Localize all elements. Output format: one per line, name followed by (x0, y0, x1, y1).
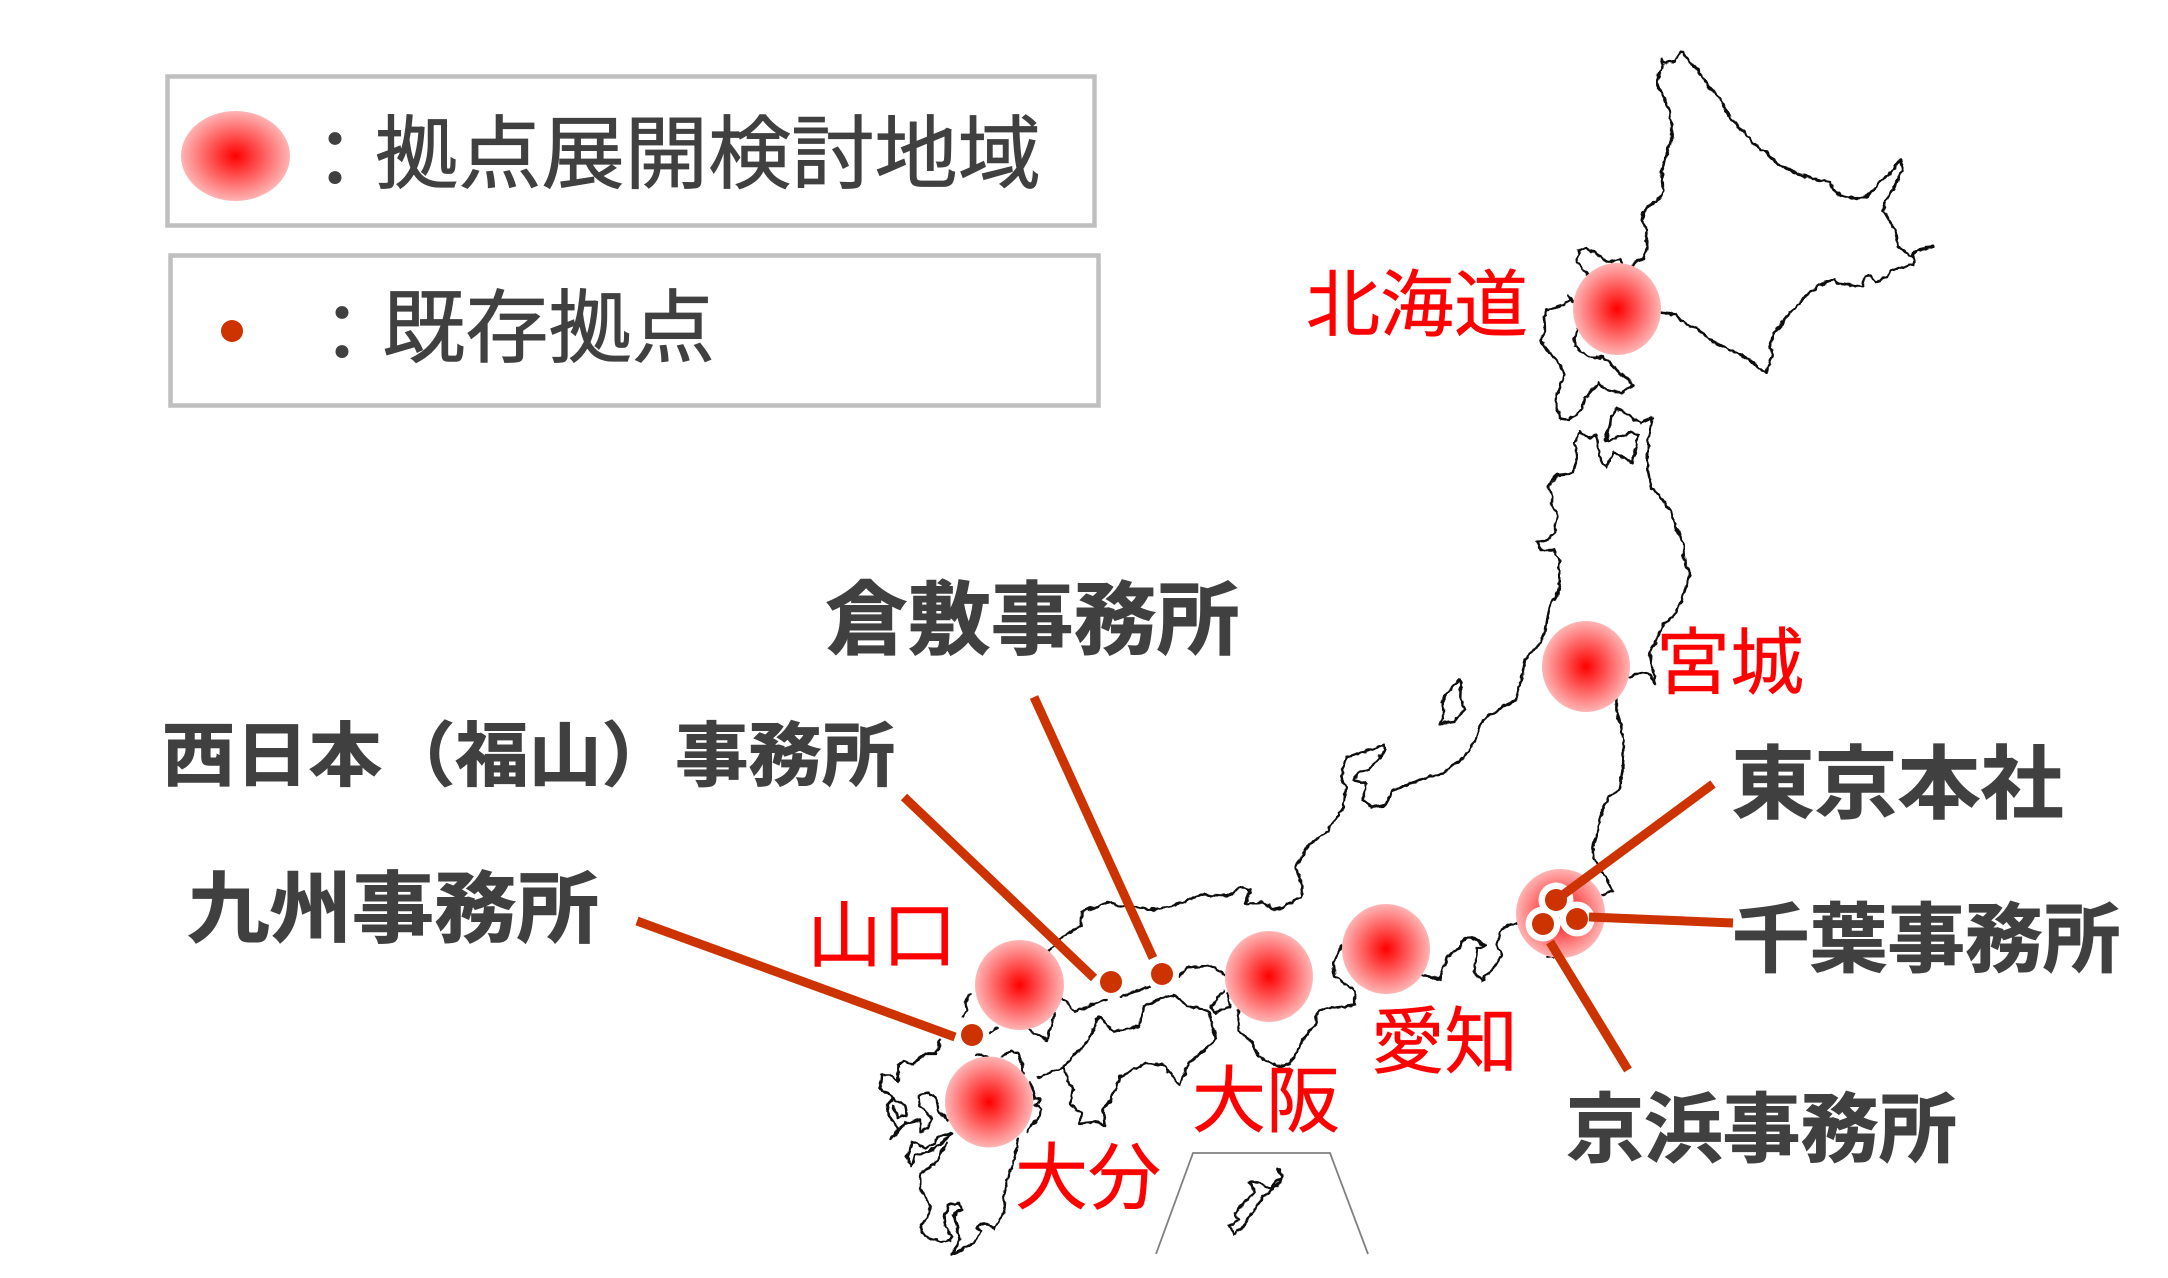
candidate region: Osaka (1225, 931, 1313, 1022)
leader line: Kyushu office (637, 921, 955, 1037)
label: Aichi: 愛知 (1371, 1002, 1518, 1083)
candidate region: Aichi (1342, 904, 1430, 994)
label: Hokkaido: 北海道 (1306, 265, 1528, 346)
leader line: Kurashiki office (1034, 697, 1153, 958)
label: Oita: 大分 (1015, 1138, 1161, 1219)
leader line: Keihin office (1550, 942, 1628, 1070)
white halos around offices (955, 882, 1594, 1052)
legend icon: dot (221, 320, 243, 342)
label: West Japan (Fukuyama) office: 西日本（福山）事務所 (162, 717, 895, 795)
label: Osaka: 大阪 (1192, 1061, 1340, 1142)
candidate region: Kanto (1516, 869, 1605, 958)
label: Miyagi: 宮城 (1656, 623, 1804, 704)
leader line: Chiba office (1589, 917, 1733, 923)
label: Chiba office: 千葉事務所 (1732, 898, 2120, 983)
candidate region: Oita (945, 1056, 1033, 1148)
label: Yamaguchi: 山口 (807, 896, 957, 977)
Tokai and Kanto south coast (1422, 923, 1553, 980)
label: Kyushu office: 九州事務所 (187, 865, 599, 953)
legend: existing offices (170, 256, 1098, 406)
legend colon: ： (295, 116, 375, 205)
leader line: West Japan office (904, 797, 1094, 978)
western Honshu, Shikoku, Kii peninsula, Okinawa (964, 895, 1355, 1235)
candidate region: Hokkaido (1573, 263, 1661, 355)
leader line: Tokyo head office (1556, 784, 1713, 900)
Kyushu outline (880, 1040, 1042, 1255)
label: Tokyo head office: 東京本社 (1732, 740, 2064, 829)
Okinawa inset frame (1156, 1153, 1368, 1254)
office dots (961, 889, 1588, 1046)
legend: candidate regions (168, 76, 1094, 226)
map of Japan (880, 52, 1933, 1255)
candidate region: Yamaguchi (975, 940, 1064, 1030)
legend text: 既存拠点 (382, 284, 715, 373)
candidate region: Miyagi (1542, 621, 1630, 712)
Honshu north and east coast, Sado (1200, 408, 1690, 909)
label: Kurashiki office: 倉敷事務所 (825, 576, 1240, 665)
label: Keihin office: 京浜事務所 (1566, 1088, 1957, 1173)
Hokkaido outline (1541, 52, 1933, 420)
legend text: 拠点展開検討地域 (375, 110, 1041, 199)
legend colon: ： (302, 290, 382, 379)
legend icon: gradient bubble (181, 111, 290, 201)
